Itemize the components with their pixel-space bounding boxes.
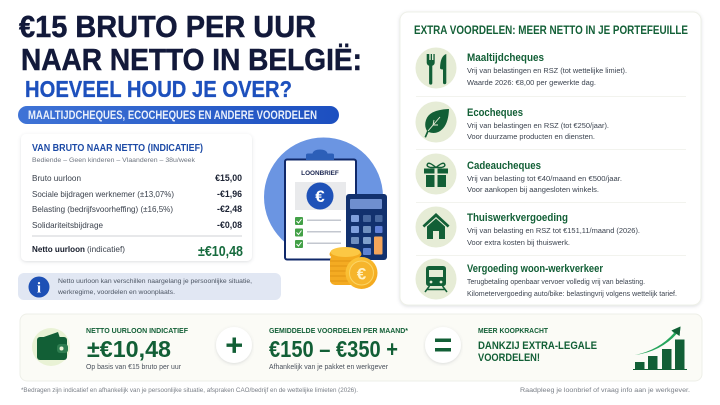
row: bruto uurloon: Bruto uurloon <box>32 173 81 183</box>
panel subheading: Bediende – Geen kinderen – Vlaanderen – 38u/week <box>32 157 196 164</box>
row: bruto uurloon <box>32 173 242 183</box>
summary: netto uurloon <box>32 326 188 371</box>
item text: Vergoeding woon-werkverkeer <box>467 263 604 275</box>
item text: Vrij van belastingen en RSZ (tot wettelijke limiet). <box>467 68 627 75</box>
icon: leaf <box>416 102 456 142</box>
icon: gift <box>416 154 456 194</box>
item text <box>467 160 622 194</box>
item text <box>467 107 609 141</box>
summary: meer koopkracht <box>478 326 597 364</box>
subtitle: HOEVEEL HOUD JE OVER? <box>25 76 292 102</box>
icon: wallet <box>32 328 70 366</box>
summary: meer koopkracht: MEER KOOPKRACHT <box>478 326 548 335</box>
note text: Netto uurloon kan verschillen naargelang je persoonlijke situatie, <box>58 278 252 285</box>
summary: gemiddelde voordelen: €150 – €350 + <box>269 336 398 362</box>
item text <box>467 212 640 247</box>
summary text <box>86 326 188 371</box>
panel: extra voordelen <box>400 12 701 305</box>
equals sign <box>425 327 461 363</box>
row: belasting: -€2,48 <box>217 204 242 214</box>
row: netto uurloon: Netto uurloon <box>32 244 85 254</box>
summary: meer koopkracht: VOORDELEN! <box>478 352 540 364</box>
summary: gemiddelde voordelen: GEMIDDELDE VOORDELEN PER MAAND* <box>269 326 408 335</box>
title <box>19 9 362 77</box>
item text: Cadeaucheques <box>467 160 541 172</box>
row: solidariteitsbijdrage <box>32 220 242 230</box>
banner <box>18 106 339 124</box>
icon: info <box>28 276 50 298</box>
footer note: Raadpleeg je loonbrief of vraag info aan je werkgever. <box>520 387 690 394</box>
item text: Vrij van belastingen en RSZ (tot €250/jaar). <box>467 123 609 130</box>
item text: Voor aankopen bij aangesloten winkels. <box>467 187 599 194</box>
item text: Voor extra kosten bij thuiswerk. <box>467 240 570 247</box>
item: thuiswerkvergoeding <box>416 206 640 248</box>
summary: meer koopkracht: DANKZIJ EXTRA-LEGALE <box>478 340 597 352</box>
row: netto uurloon: ±€10,48 <box>198 244 243 260</box>
note text: werkregime, voordelen en woonplaats. <box>57 289 175 296</box>
item: cadeaucheques <box>416 154 622 194</box>
summary text: ±€10,48 <box>87 336 171 362</box>
footnote: *Bedragen zijn indicatief en afhankelijk van je persoonlijke situatie, afspraken CAO/bedrijf en de wettelijke limieten (2026). <box>21 387 358 394</box>
plus sign <box>216 327 252 363</box>
row: belasting: Belasting (bedrijfsvoorheffing) (±16,5%) <box>32 204 173 214</box>
banner: MAALTIJDCHEQUES, ECOCHEQUES EN ANDERE VOORDELEN <box>28 110 317 122</box>
info note <box>18 273 281 300</box>
item text: Vrij van belasting tot €40/maand en €500/jaar. <box>467 176 622 183</box>
row: bruto uurloon: €15,00 <box>215 173 242 183</box>
item text: Voor duurzame producten en diensten. <box>467 134 595 141</box>
item text: Maaltijdcheques <box>467 52 544 64</box>
item: ecocheques <box>416 102 609 142</box>
illustration: loonbrief with calculator and coins <box>264 138 387 289</box>
item: maaltijdcheques <box>416 48 627 88</box>
item text <box>467 263 677 298</box>
row: sociale bijdragen: -€1,96 <box>217 189 242 199</box>
row: solidariteitsbijdrage: Solidariteitsbijdrage <box>32 220 103 230</box>
summary text: NETTO UURLOON INDICATIEF <box>86 326 188 335</box>
row: netto uurloon <box>32 244 243 260</box>
item text: Waarde 2026: €8,00 per gewerkte dag. <box>467 80 596 87</box>
summary: gemiddelde voordelen: Afhankelijk van je pakket en werkgever <box>269 364 389 371</box>
summary: gemiddelde voordelen <box>269 326 408 371</box>
row: netto uurloon: (indicatief) <box>87 244 125 254</box>
clipboard <box>285 150 356 260</box>
icon: info: i <box>37 280 41 296</box>
coins: € <box>357 264 367 284</box>
chart: rising bars with arrow <box>633 326 687 370</box>
item text: Vrij van belasting en RSZ tot €151,11/maand (2026). <box>467 228 640 235</box>
panel: summary band <box>20 314 702 381</box>
calculator <box>346 194 387 260</box>
row: belasting <box>32 204 242 214</box>
row: solidariteitsbijdrage: -€0,08 <box>217 220 242 230</box>
icon: house <box>416 206 456 248</box>
item text: Kilometervergoeding auto/bike: belastingvrij volgens wettelijk tarief. <box>467 291 677 298</box>
item: vergoeding woon-werkverkeer <box>416 258 677 300</box>
clipboard: € <box>315 187 325 206</box>
item text: Ecocheques <box>467 107 523 119</box>
item text: Thuiswerkvergoeding <box>467 212 568 224</box>
item text <box>467 52 627 87</box>
title: NAAR NETTO IN BELGIË: <box>21 42 362 77</box>
icon: train <box>416 258 456 300</box>
row: sociale bijdragen: Sociale bijdragen werknemer (±13,07%) <box>32 189 174 199</box>
summary text: Op basis van €15 bruto per uur <box>86 364 182 371</box>
icon: cutlery <box>416 48 456 88</box>
clipboard: LOONBRIEF <box>301 170 339 177</box>
item text: Terugbetaling openbaar vervoer volledig vrij van belasting. <box>467 279 645 286</box>
coins <box>330 247 378 289</box>
note text <box>57 278 252 296</box>
panel heading: VAN BRUTO NAAR NETTO (INDICATIEF) <box>32 143 203 154</box>
panel: bruto naar netto <box>21 134 252 261</box>
title: €15 BRUTO PER UUR <box>19 9 316 44</box>
